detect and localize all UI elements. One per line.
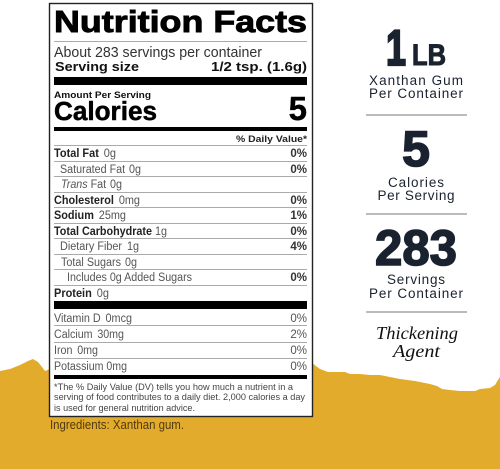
stat: 5 calories: Per Serving (378, 188, 454, 203)
nutrient rows: Total Fat 0g (54, 148, 116, 160)
vitamins and minerals (54, 313, 307, 373)
stat: 1 lb: Per Container (369, 86, 464, 101)
stat: 283 servings: 283 (375, 220, 457, 276)
handwritten label: thickening agent: Agent (392, 341, 441, 361)
vitamins and minerals: Iron 0mg (54, 345, 98, 357)
footnote (54, 382, 305, 414)
nutrient rows: Total Carbohydrate 1g (54, 226, 167, 238)
stat: 283 servings: Servings (387, 272, 445, 287)
stat: 1 lb: Xanthan Gum (369, 73, 463, 88)
footnote: serving of food contributes to a daily diet. 2,000 calories a day (54, 392, 305, 403)
stat: 5 calories (378, 121, 454, 203)
nutrient rows: 0% (290, 272, 307, 284)
calories: 5 (289, 90, 307, 127)
serving size: 1/2 tsp. (1.6g) (211, 59, 307, 74)
stat: 5 calories: 5 (402, 121, 430, 177)
yellow torn-edge background (0, 359, 500, 469)
nutrient rows: 4% (290, 241, 307, 253)
serving size (55, 59, 307, 74)
nutrient rows: Protein 0g (54, 288, 109, 300)
vitamins and minerals: Potassium 0mg (54, 361, 127, 373)
vitamins and minerals: Calcium 30mg (54, 329, 124, 341)
vitamins and minerals: Vitamin D 0mcg (54, 313, 132, 325)
amount per serving: Amount Per Serving (54, 90, 151, 100)
panel: nutrition facts label (50, 4, 312, 416)
calories: Calories (54, 98, 157, 126)
nutrient rows: 0% (290, 195, 307, 207)
nutrient rows: 0% (290, 226, 307, 238)
handwritten label: thickening agent (376, 323, 458, 361)
stat: 1 lb: LB (412, 39, 446, 72)
handwritten label: thickening agent: Thickening (376, 323, 458, 343)
nutrient rows (54, 148, 307, 300)
nutrient rows: Dietary Fiber 1g (60, 241, 139, 253)
stat: 1 lb (369, 20, 464, 101)
stat: 283 servings: Per Container (369, 286, 464, 301)
nutrient rows: Sodium 25mg (54, 210, 126, 222)
nutrient rows: 0% (290, 148, 307, 160)
footnote: is used for general nutrition advice. (54, 403, 195, 414)
nutrient rows: 1% (290, 210, 307, 222)
vitamins and minerals: 0% (290, 361, 307, 373)
nutrient rows: Cholesterol 0mg (54, 195, 140, 207)
title: Nutrition Facts (54, 4, 307, 39)
calories (54, 90, 307, 127)
nutrient rows: Saturated Fat 0g (60, 164, 141, 176)
nutrient rows: Includes 0g Added Sugars (67, 272, 192, 284)
vitamins and minerals: 2% (290, 329, 307, 341)
stat: 283 servings (369, 220, 464, 301)
nutrient rows: Total Sugars 0g (61, 257, 137, 269)
serving size: Serving size (55, 59, 139, 74)
stat: 5 calories: Calories (388, 175, 444, 190)
ingredients: Ingredients: Xanthan gum. (50, 418, 184, 432)
nutrient rows: Trans Fat 0g (61, 179, 122, 191)
footnote: *The % Daily Value (DV) tells you how much a nutrient in a (54, 382, 294, 393)
servings per container: About 283 servings per container (54, 45, 262, 61)
daily value header: % Daily Value* (236, 134, 308, 144)
stat: 1 lb: 1 (386, 20, 406, 76)
vitamins and minerals: 0% (290, 345, 307, 357)
vitamins and minerals: 0% (290, 313, 307, 325)
nutrient rows: 0% (290, 164, 307, 176)
